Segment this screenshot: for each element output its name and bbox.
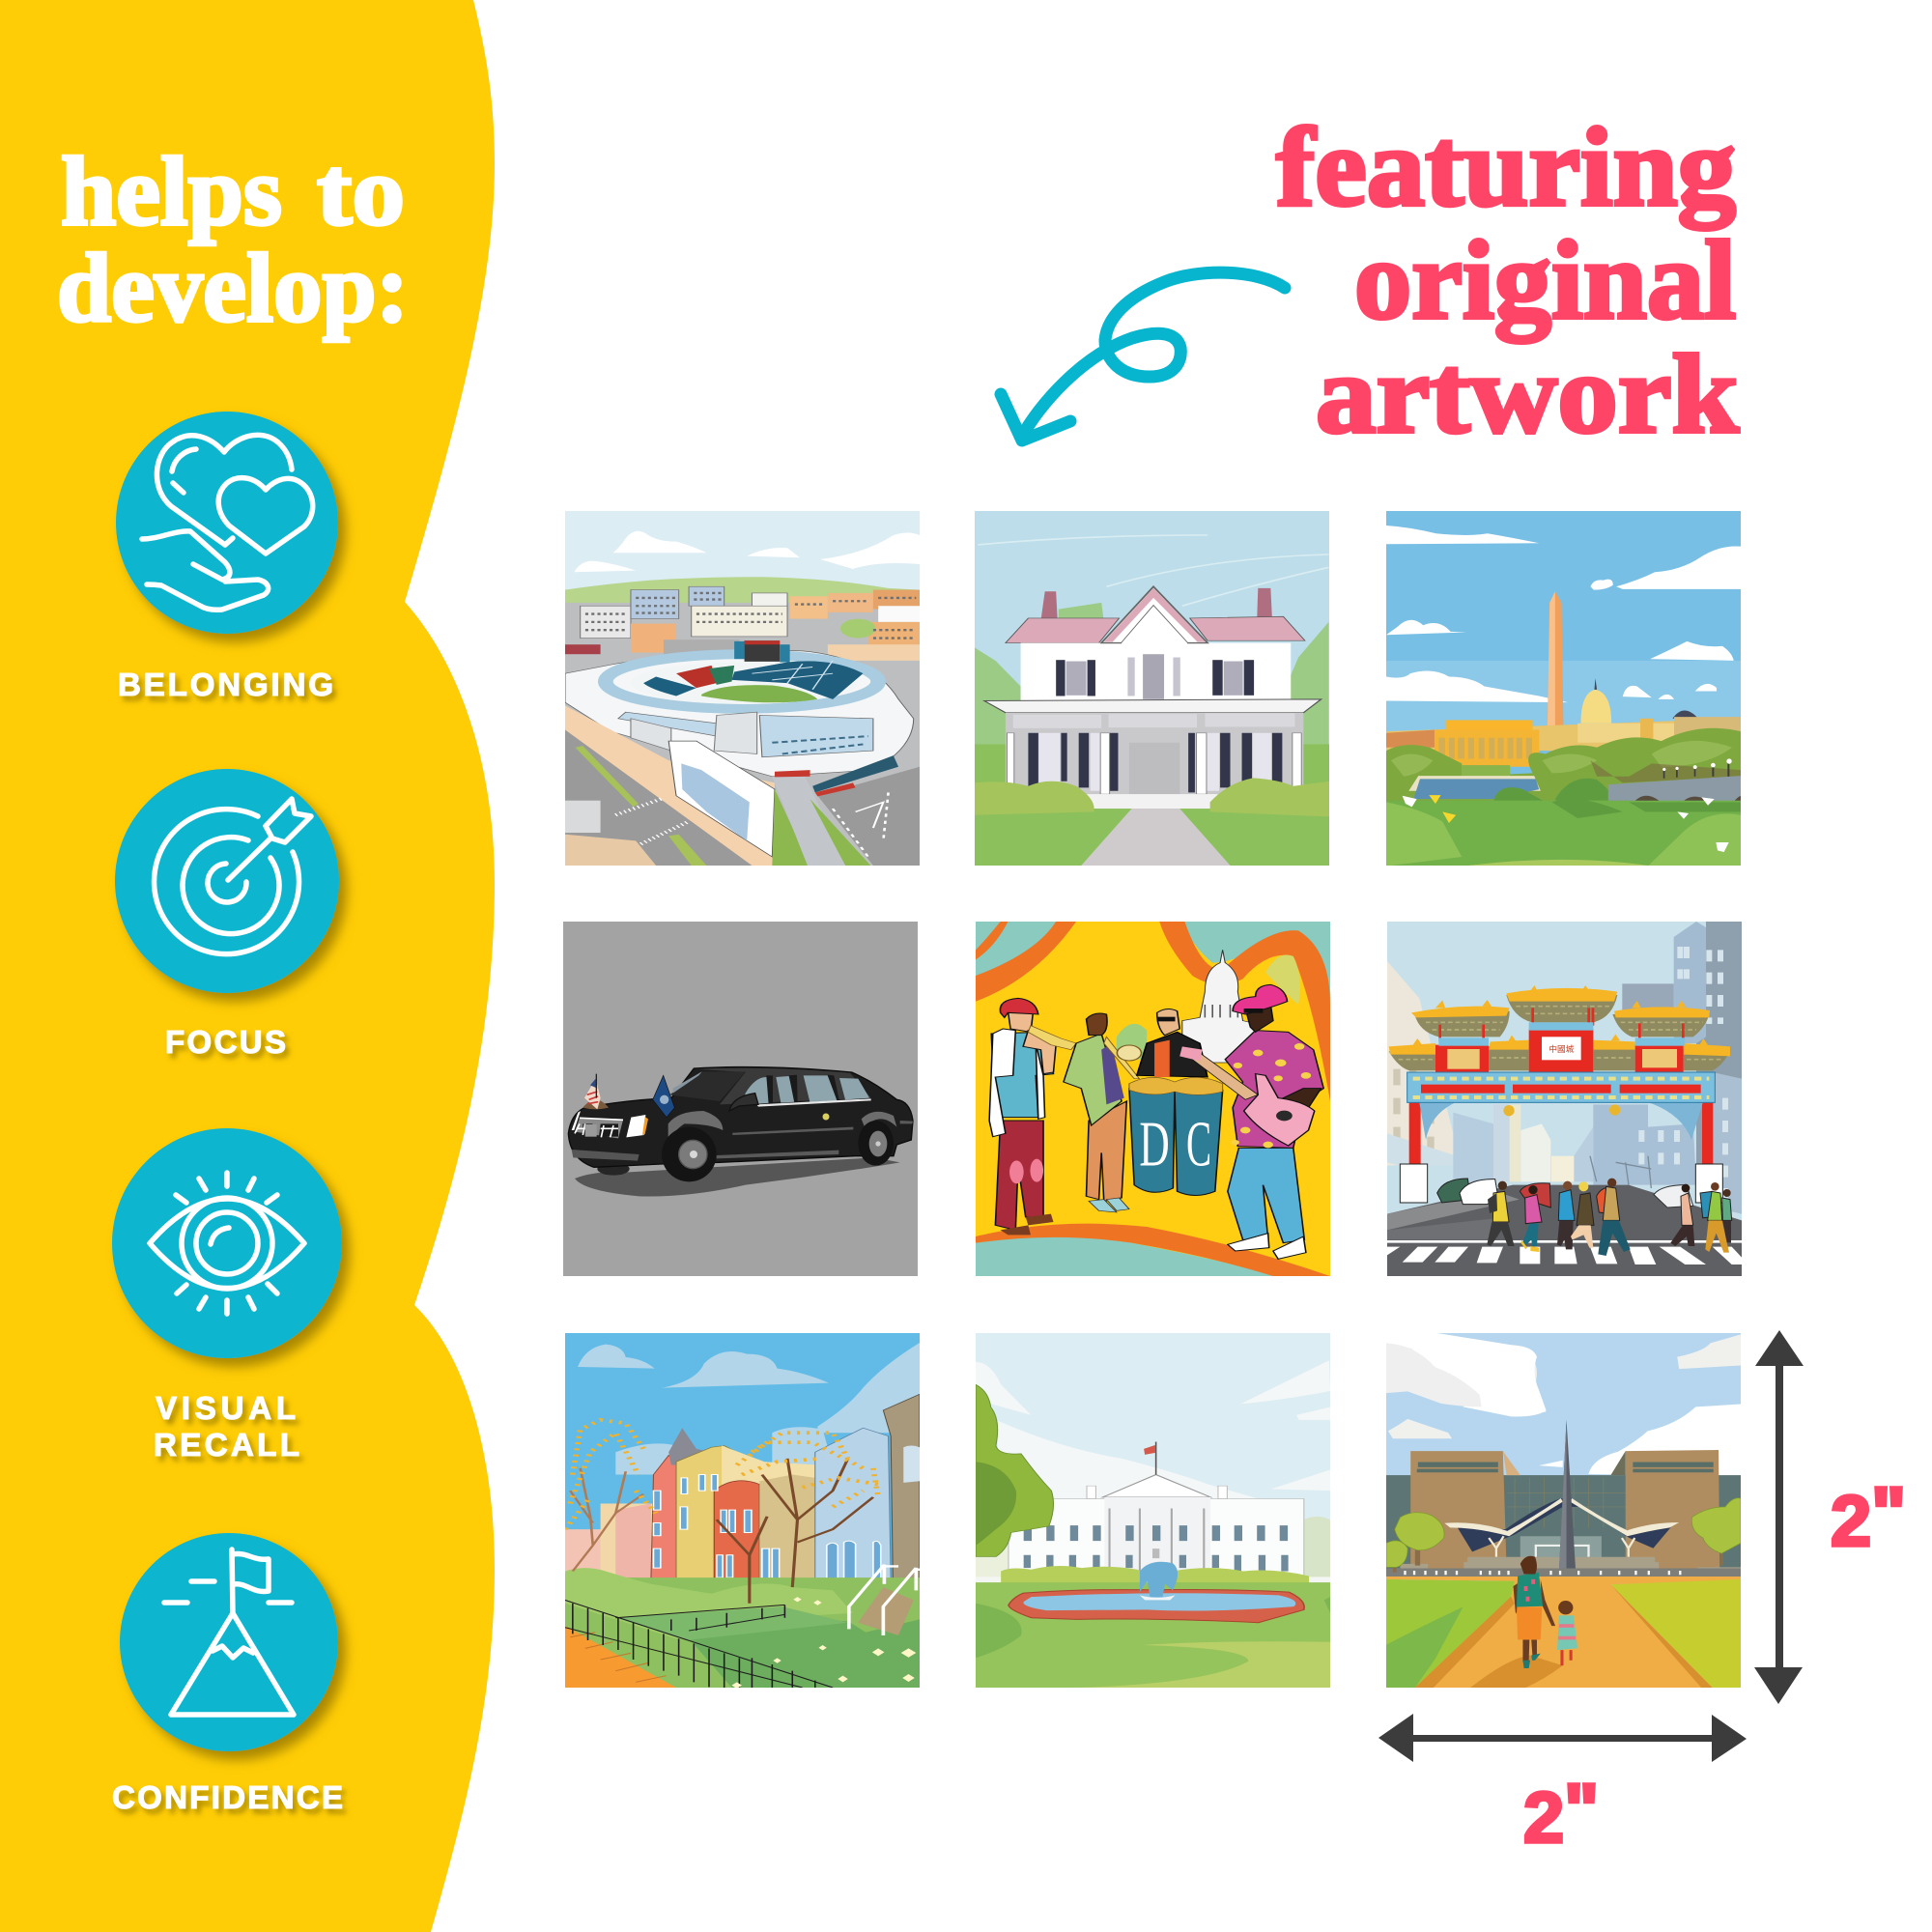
panel: yellow wavy sidebar xyxy=(0,0,495,1932)
tile: presidential limousine xyxy=(563,922,918,1276)
arrow: horizontal 2 inch dimension xyxy=(1378,1714,1747,1762)
tile: dc jazz musicians: D xyxy=(1139,1108,1170,1179)
heading: featuring original artwork xyxy=(1276,105,1739,457)
label: height 2 inches: 2 xyxy=(1831,1481,1870,1561)
badge: confidence xyxy=(120,1533,338,1751)
label: visual recall: RECALL xyxy=(154,1427,299,1463)
heading: helps to develop: develop: xyxy=(57,234,409,343)
tile: rowhouses xyxy=(565,1333,920,1688)
label: visual recall xyxy=(154,1390,299,1463)
badge: visual recall xyxy=(112,1128,342,1358)
badge: belonging xyxy=(116,412,338,634)
tile: national mall skyline xyxy=(1386,511,1741,866)
heading: featuring original artwork: original xyxy=(1354,218,1736,343)
badge: focus xyxy=(115,769,339,993)
heading: helps to develop xyxy=(57,137,409,343)
heading: helps to develop: to xyxy=(317,137,405,246)
arrow: vertical 2 inch dimension xyxy=(1754,1330,1804,1704)
arrow: teal loop arrow xyxy=(1001,272,1285,440)
tile: dc jazz musicians xyxy=(976,922,1330,1276)
label: visual recall: VISUAL xyxy=(156,1390,296,1426)
heading: featuring original artwork: artwork xyxy=(1316,332,1739,457)
heading: helps to develop: helps xyxy=(61,137,282,246)
tile: dc jazz musicians: C xyxy=(1186,1108,1211,1179)
label: width 2 inches: " xyxy=(1564,1769,1599,1849)
tile: stadium xyxy=(565,511,920,866)
tile: chinatown friendship archway: 中國城 xyxy=(1548,1043,1575,1054)
label: confidence: CONFIDENCE xyxy=(112,1779,343,1815)
heading: featuring original artwork: featuring xyxy=(1276,105,1736,230)
tile: african american museum xyxy=(1386,1333,1741,1688)
label: focus: FOCUS xyxy=(165,1024,286,1060)
label: belonging: BELONGING xyxy=(118,667,333,702)
tile: frederick douglass house xyxy=(975,511,1329,866)
tile: white house xyxy=(976,1333,1330,1688)
label: width 2 inches: 2 xyxy=(1523,1777,1563,1858)
tile: chinatown friendship archway xyxy=(1387,922,1742,1276)
label: height 2 inches: " xyxy=(1871,1472,1906,1552)
